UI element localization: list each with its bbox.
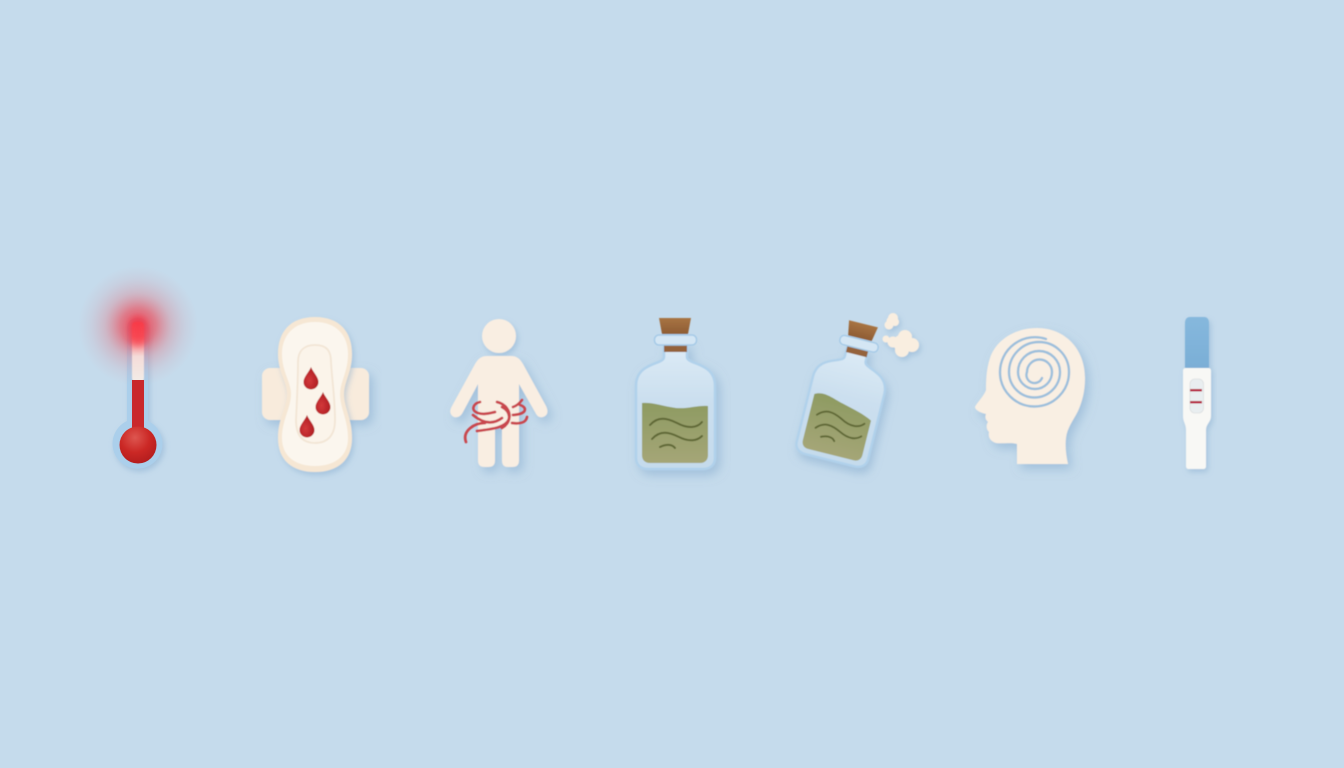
person head [482,319,516,353]
test white body [1183,368,1211,469]
green liquid [642,403,708,463]
test window [1190,379,1204,413]
icon: glass bottle with green liquid [636,318,715,469]
test blue cap [1185,317,1209,370]
thermometer red haze [129,316,147,346]
icon: thermometer with red glow [78,266,198,469]
blood drop 2 [316,392,330,415]
thermometer red bulb [120,426,156,464]
cork lower [664,345,687,352]
pad wings [262,368,369,420]
icon: person with abdominal pain lines [450,319,547,467]
icon: tilted open bottle with fumes [794,313,919,469]
small fume cloud [884,313,899,330]
bottle glass [636,344,715,469]
liquid waves [650,419,702,448]
pad channel [296,345,335,443]
thermometer white upper column [132,322,144,382]
bottle lip [654,335,696,345]
pad inner layer [282,322,348,466]
thermometer glass tube and bulb [113,318,162,469]
test red lines [1190,389,1202,403]
spiral [1000,337,1069,406]
tilted bottle [794,315,900,469]
thermometer glow [78,266,198,386]
blood drop 1 [304,367,318,390]
icon: sanitary pad with blood drops [262,317,369,472]
person body [450,356,547,467]
cork top [659,318,691,334]
blood drop 3 [300,415,314,438]
thermometer red column [132,380,144,430]
abdominal pain lines [465,400,527,442]
large fume cloud [882,330,919,357]
head silhouette [975,328,1085,464]
pad body [278,317,352,472]
icon: pregnancy test [1183,317,1211,469]
icon: head with spiral [975,328,1085,464]
